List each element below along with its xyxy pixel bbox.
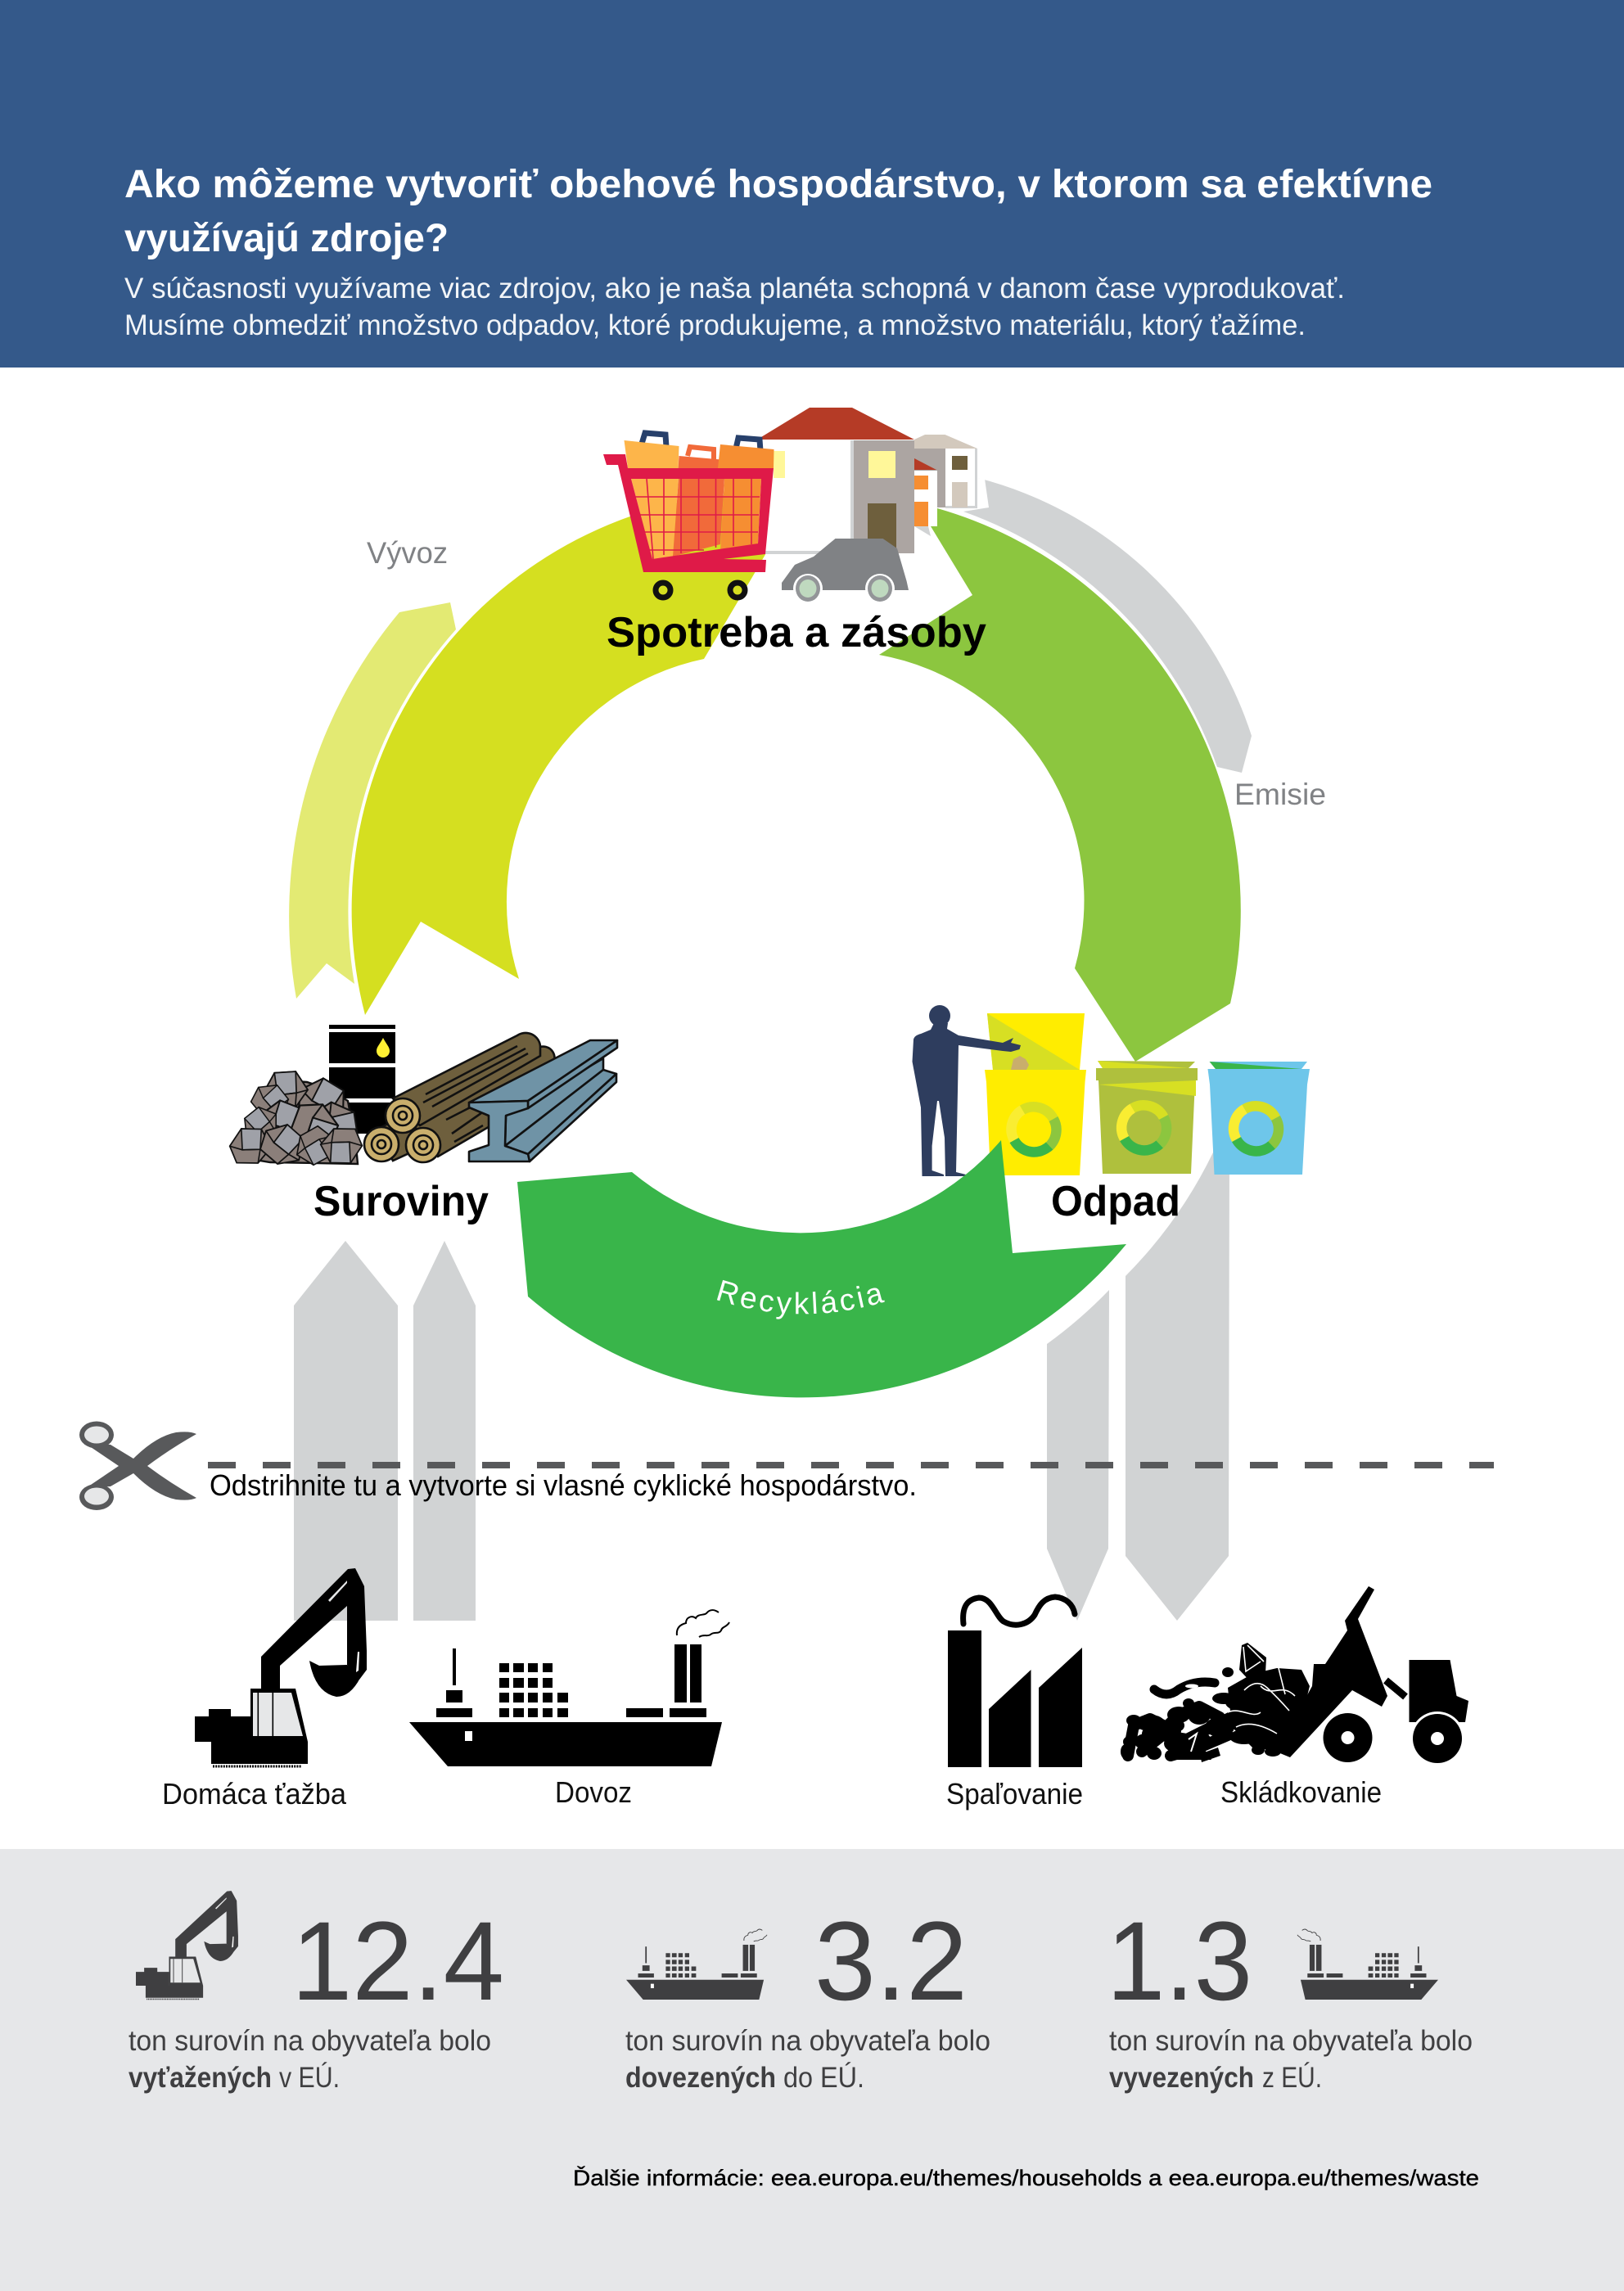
icon: blue bin [1208,1062,1310,1175]
label: recycling: Recyklácia [717,1280,885,1319]
arrow: export [289,602,456,999]
icon: person [912,1005,1021,1176]
icon: small ship [626,1929,767,2000]
description [1109,2025,1473,2094]
further information: Ďalšie informácie: eea.europa.eu/themes/households a eea.europa.eu/themes/waste [573,2165,1479,2190]
waste heap [1121,1643,1310,1762]
rear wheel [1323,1713,1372,1762]
description [625,2025,990,2094]
arrow: recycling [517,1140,1126,1397]
panel: statistics [0,1849,1624,2291]
stat: extraction [129,1891,504,2094]
icon: dump truck and landfill [1121,1586,1468,1766]
icon: rocks [227,1066,365,1172]
description: v EÚ. [279,2062,340,2094]
value: 12.4 [291,1899,504,2024]
description: dovezených [625,2062,776,2094]
description [129,2025,491,2094]
label: import: Dovoz [555,1775,632,1809]
description: vyvezených [1109,2062,1254,2094]
icon: oil barrel [329,1025,395,1134]
icon: excavator [195,1568,367,1766]
subtitle: V súčasnosti využívame viac zdrojov, ako je naša planéta schopná v danom čase vyprodukovať. [124,273,1345,304]
description: z EÚ. [1262,2062,1322,2094]
value: 3.2 [814,1899,968,2024]
label: landfill: Skládkovanie [1220,1775,1382,1809]
heading: raw materials: Suroviny [314,1178,489,1225]
arrow: incineration down [1047,1290,1109,1621]
value: 1.3 [1107,1899,1252,2024]
heading: consumption and stock: Spotreba a zásoby [607,609,986,656]
description: vyťažených [129,2062,272,2094]
label: incineration: Spaľovanie [946,1777,1083,1811]
title: Ako môžeme vytvoriť obehové hospodárstvo, v ktorom sa efektívne [124,163,1432,206]
stat: import [625,1899,990,2094]
icon: shopping cart [603,433,774,598]
dump body [1276,1586,1387,1757]
icon: scissors [79,1421,196,1510]
label: domestic extraction: Domáca ťažba [162,1777,347,1811]
arrow: raw materials to consumption [352,493,774,1015]
title: využívajú zdroje? [124,217,449,260]
cab [1410,1660,1468,1722]
description: ton surovín na obyvateľa bolo [129,2025,491,2057]
arrow: import up [413,1241,476,1621]
icon: small ship mirrored [1297,1929,1438,2000]
icon: small excavator [136,1891,238,1999]
description: ton surovín na obyvateľa bolo [625,2025,990,2057]
description: ton surovín na obyvateľa bolo [1109,2025,1473,2057]
title [124,163,1432,260]
icon: houses and car [757,408,989,603]
icon: logs [364,1033,554,1162]
icon: incineration factory [948,1597,1082,1767]
arrow: emissions [963,478,1252,773]
icon: steel beam [469,1040,617,1161]
stat: export [1107,1899,1473,2094]
icon: raw materials [227,1025,617,1172]
heading: waste: Odpad [1051,1178,1180,1225]
icon: cargo ship [409,1610,729,1766]
front wheel [1410,1711,1464,1766]
label: export: Vývoz [367,536,448,570]
icon: car [782,539,909,603]
cut line [79,1421,1494,1510]
header band [0,0,1624,368]
subtitle [124,273,1345,341]
cut instruction: Odstrihnite tu a vytvorte si vlasné cyklické hospodárstvo. [210,1468,917,1502]
description: do EÚ. [783,2062,864,2094]
subtitle: Musíme obmedziť množstvo odpadov, ktoré produkujeme, a množstvo materiálu, ktorý ťažíme. [124,309,1306,341]
recycling curve guide [715,1299,886,1314]
label: emissions: Emisie [1234,778,1326,811]
icon: person and waste bins [912,1005,1310,1176]
arrow: domestic extraction up [294,1241,398,1621]
icon: yellow bin [985,1013,1086,1175]
arrow: landfill down [1126,1142,1229,1621]
icon: olive bin [1096,1061,1198,1174]
arrow: consumption to waste [879,508,1241,1062]
small emission shard [914,526,931,536]
